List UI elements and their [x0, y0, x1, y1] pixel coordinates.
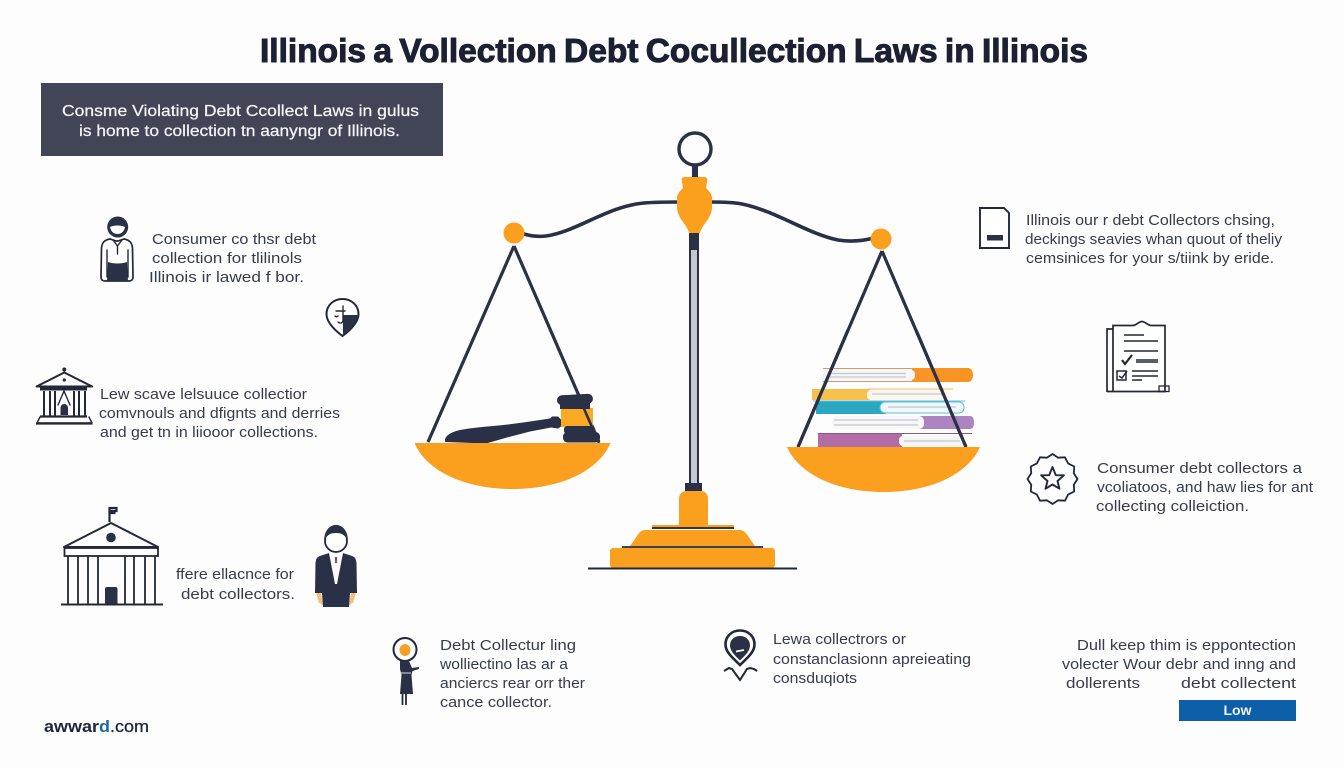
text: consumer debt collectors: vcoliatoos, and haw lies for ant — [1097, 480, 1313, 496]
strings right — [798, 251, 966, 447]
icon: consumer person — [101, 216, 133, 281]
hanging ring — [679, 133, 711, 179]
text: consumer collection — [149, 232, 316, 286]
icon: document — [980, 208, 1009, 248]
icon: shield pin — [326, 299, 358, 336]
text: lewa collectors: constanclasionn apreieating — [773, 652, 971, 668]
text: consumer debt collectors: collecting colleiction. — [1096, 499, 1249, 515]
text: guidance for collectors: ffere ellacnce for — [176, 567, 294, 583]
stand pole — [685, 232, 702, 491]
icon: person with halo — [394, 638, 419, 705]
icon: courthouse — [61, 508, 163, 604]
footer brand: awward.com — [44, 717, 149, 736]
text: guidance for collectors: debt collectors. — [181, 587, 295, 603]
text: illinois collectors: Illinois our r debt Collectors chsing, — [1026, 213, 1275, 229]
icon: museum building — [36, 368, 92, 424]
pivot left — [504, 222, 524, 244]
text: lewa collectors — [773, 632, 971, 687]
book purple — [832, 416, 974, 429]
balance beam — [524, 202, 874, 241]
text: guidance for collectors — [176, 567, 295, 603]
icon: man in suit — [315, 525, 357, 607]
text: low scale: and get tn in liiooor collections. — [100, 425, 318, 441]
text: dull keep protection — [1062, 638, 1296, 692]
central balance scale — [414, 133, 980, 568]
text: low scale: comvnouls and dfignts and derries — [99, 406, 340, 422]
text: dull keep protection: volecter Wour debr and inng and — [1062, 657, 1296, 673]
panel: intro banner — [41, 83, 443, 156]
text: low scale — [99, 387, 340, 441]
text: illinois collectors: deckings seavies whan quout of theliy — [1025, 232, 1283, 248]
text: illinois collectors: cemsinices for your s/tiink by eride. — [1026, 251, 1274, 267]
text: consumer collection: Illinois ir lawed f bor. — [149, 270, 304, 286]
icon: stack of books — [812, 368, 974, 447]
text: consumer debt collectors: Consumer debt collectors a — [1097, 461, 1303, 477]
book teal — [813, 401, 965, 414]
text: debt collecturing: Debt Collectur ling — [440, 638, 576, 654]
text: lewa collectors: consduqiots — [773, 671, 857, 687]
icon: checklist — [1107, 322, 1169, 392]
beam centre finial — [677, 177, 712, 233]
text: consumer debt collectors — [1096, 461, 1313, 515]
text: dull keep protection: Dull keep thim is eppontection — [1077, 638, 1296, 654]
text: consumer collection: collection for tlilinols — [152, 251, 302, 267]
book orange — [823, 368, 973, 382]
pivot right — [870, 228, 892, 250]
button: low label — [1179, 700, 1296, 721]
text: lewa collectors: Lewa collectrors or — [773, 632, 906, 648]
text: debt collecturing: cance collector. — [440, 695, 552, 711]
button: low label: Low — [1224, 702, 1252, 718]
bowl left — [414, 443, 610, 489]
text: consumer collection: Consumer co thsr debt — [152, 232, 316, 248]
strings left — [428, 246, 599, 442]
text: dull keep protection: debt collectent — [1181, 676, 1296, 692]
bowl right — [787, 447, 980, 492]
text: debt collecturing — [439, 638, 585, 711]
strings over books — [798, 330, 966, 447]
book yellow — [812, 389, 953, 400]
text: debt collecturing: wolliectino las ar a — [439, 657, 569, 673]
panel: intro banner: Consme Violating Debt Ccollect Laws in gulus — [62, 103, 419, 120]
icon: gavel — [445, 394, 600, 444]
title: Illinois a Vollection Debt Cocullection Laws in Illinois — [260, 32, 1088, 69]
text: debt collecturing: anciercs rear orr ther — [440, 676, 585, 692]
book magenta — [818, 434, 972, 447]
icon: star badge — [1028, 454, 1078, 504]
text: illinois collectors — [1025, 213, 1283, 267]
icon: location pin — [724, 630, 757, 680]
panel: intro banner: is home to collection tn aanyngr of Illinois. — [79, 123, 400, 140]
text: dull keep protection: dollerents — [1066, 676, 1140, 692]
stand base — [588, 491, 797, 568]
text: low scale: Lew scave lelsuuce collectior — [100, 387, 307, 403]
